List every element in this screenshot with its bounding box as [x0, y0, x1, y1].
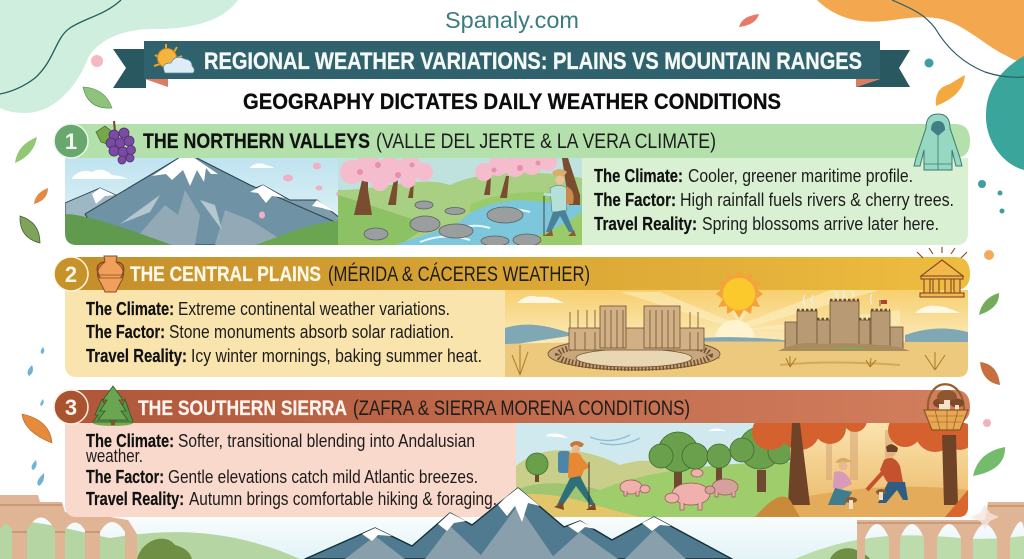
section 1 body [65, 158, 968, 245]
section 2 heading: (MÉRIDA & CÁCERES WEATHER) [328, 261, 590, 286]
background: bottom sky [0, 505, 1024, 559]
number badge 2: 2 [65, 262, 77, 287]
section 2 text: The Factor: [86, 322, 165, 342]
section 3 text: The Factor: [86, 467, 164, 487]
section 3 heading: (ZAFRA & SIERRA MORENA CONDITIONS) [353, 396, 690, 420]
section 3 text: Softer, transitional blending into Andalusian [178, 431, 475, 451]
castle [785, 301, 903, 350]
panel: central plains [54, 247, 970, 377]
illustration: mountain and cherry valley [65, 153, 582, 246]
section 1 heading: (VALLE DEL JERTE & LA VERA CLIMATE) [376, 129, 716, 153]
section 1 text: The Climate: [594, 166, 683, 186]
subtitle: GEOGRAPHY DICTATES DAILY WEATHER CONDITIONS [243, 89, 781, 114]
section 1 text: Cooler, greener maritime profile. [688, 166, 913, 186]
section 1 text: Travel Reality: [594, 214, 697, 234]
section 3 text: Autumn brings comfortable hiking & foraging. [189, 489, 497, 509]
hiker with backpack [554, 441, 596, 510]
section 2 text: Icy winter mornings, baking summer heat. [191, 346, 482, 366]
title banner [113, 41, 910, 88]
section 2 text: The Climate: [86, 299, 174, 319]
panel: northern valleys [54, 114, 970, 246]
section 2 text: Stone monuments absorb solar radiation. [169, 322, 454, 342]
section 2 text [86, 299, 482, 366]
title text: REGIONAL WEATHER VARIATIONS: PLAINS VS MOUNTAIN RANGES [204, 48, 862, 75]
section 1 heading [143, 129, 716, 153]
icon: amphora [97, 256, 124, 292]
section 1 text [594, 166, 954, 234]
section 1 text: The Factor: [594, 190, 676, 210]
section 3 body [65, 423, 968, 517]
number badge 1 [54, 124, 88, 158]
background: green hills [0, 520, 1024, 559]
number badge 3 [54, 390, 88, 424]
section 3 heading [138, 396, 690, 420]
section 1 text: Spring blossoms arrive later here. [702, 214, 939, 234]
section 3 text: The Climate: [86, 431, 174, 451]
brand: Spanaly.com: Spanaly.com [445, 7, 579, 33]
section 1 header bar [71, 124, 970, 158]
hiker [544, 169, 576, 236]
illustration: Roman theatre and castle [505, 290, 968, 377]
autumn forest [790, 423, 968, 517]
section 3 heading: THE SOUTHERN SIERRA [138, 396, 347, 420]
section 3 text [85, 431, 497, 509]
icon: hoodie [914, 114, 962, 170]
section 2 text: Extreme continental weather variations. [178, 299, 450, 319]
section 1 heading: THE NORTHERN VALLEYS [143, 129, 370, 153]
section 3 header bar [71, 390, 970, 423]
pigs [620, 469, 738, 510]
section 3 text: weather. [85, 446, 143, 466]
background blob: top left [0, 0, 238, 113]
bottom mountains [305, 488, 732, 559]
section 2 heading: THE CENTRAL PLAINS [130, 262, 321, 286]
section 3 text: Travel Reality: [86, 489, 184, 509]
panel: southern sierra [54, 384, 974, 517]
illustration: hikers, pigs and foragers [516, 423, 968, 517]
icon: grapes [96, 121, 136, 164]
section 2 heading [130, 261, 590, 286]
section 3 text: Gentle elevations catch mild Atlantic breezes. [168, 467, 478, 487]
aqueduct left [0, 495, 137, 559]
sun [716, 270, 763, 318]
background blob: top right orange and teal [817, 0, 1024, 170]
icon: pine trees [93, 386, 133, 426]
icon: sun and cloud [154, 44, 194, 73]
icon: temple [917, 247, 967, 297]
number badge 1: 1 [65, 129, 77, 154]
number badge 2 [54, 257, 88, 291]
icon: mushroom basket [924, 384, 968, 430]
section 2 body [65, 290, 968, 377]
section 2 text: Travel Reality: [86, 346, 187, 366]
aqueduct right [857, 502, 1024, 559]
number badge 3: 3 [65, 395, 77, 420]
section 1 text: High rainfall fuels rivers & cherry trees. [680, 190, 954, 210]
foragers [828, 444, 908, 509]
section 2 header bar [71, 257, 970, 290]
